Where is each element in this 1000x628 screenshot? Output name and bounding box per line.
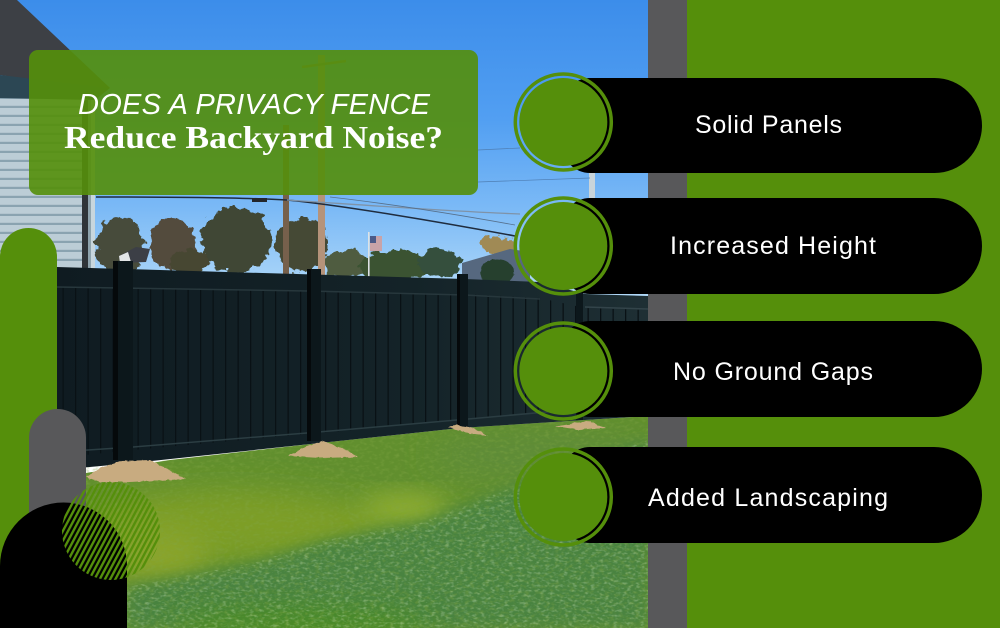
pill xyxy=(562,78,982,173)
label: Solid Panels xyxy=(695,111,842,139)
decorative hatched circle xyxy=(62,482,160,580)
green right panel xyxy=(687,0,1000,628)
black vinyl privacy fence xyxy=(57,261,648,470)
pill xyxy=(562,321,982,417)
heading line 1: DOES A PRIVACY FENCE xyxy=(78,89,431,121)
badge circle xyxy=(515,198,611,294)
pill xyxy=(562,447,982,543)
title panel xyxy=(29,50,478,195)
background photo: backyard with black privacy fence xyxy=(0,0,650,628)
badge circle xyxy=(515,323,611,419)
grass lawn xyxy=(40,415,650,628)
item: No Ground Gaps xyxy=(515,321,982,419)
house with roof and siding xyxy=(0,0,110,270)
lower, mown stripe of lawn xyxy=(127,440,648,628)
decorative black arch, lower left xyxy=(0,502,127,628)
tree line xyxy=(96,207,515,282)
decorative green pill, lower left xyxy=(0,228,57,628)
dirt mounds at fence posts xyxy=(86,421,606,482)
badge circle xyxy=(515,74,611,170)
utility poles and wires xyxy=(96,55,595,275)
item: Added Landscaping xyxy=(515,447,982,545)
flag xyxy=(368,232,382,277)
distant buildings xyxy=(119,247,530,285)
fence posts xyxy=(118,261,133,449)
heading line 2: Reduce Backyard Noise? xyxy=(64,119,443,155)
item: Increased Height xyxy=(515,198,982,294)
decorative gray pill, lower left xyxy=(29,409,86,628)
badge circle xyxy=(515,449,611,545)
label: Added Landscaping xyxy=(648,484,888,512)
sky xyxy=(0,0,648,300)
label: No Ground Gaps xyxy=(673,358,873,386)
pill xyxy=(562,198,982,294)
gray vertical band xyxy=(648,0,687,628)
label: Increased Height xyxy=(670,232,876,260)
item: Solid Panels xyxy=(515,74,982,173)
